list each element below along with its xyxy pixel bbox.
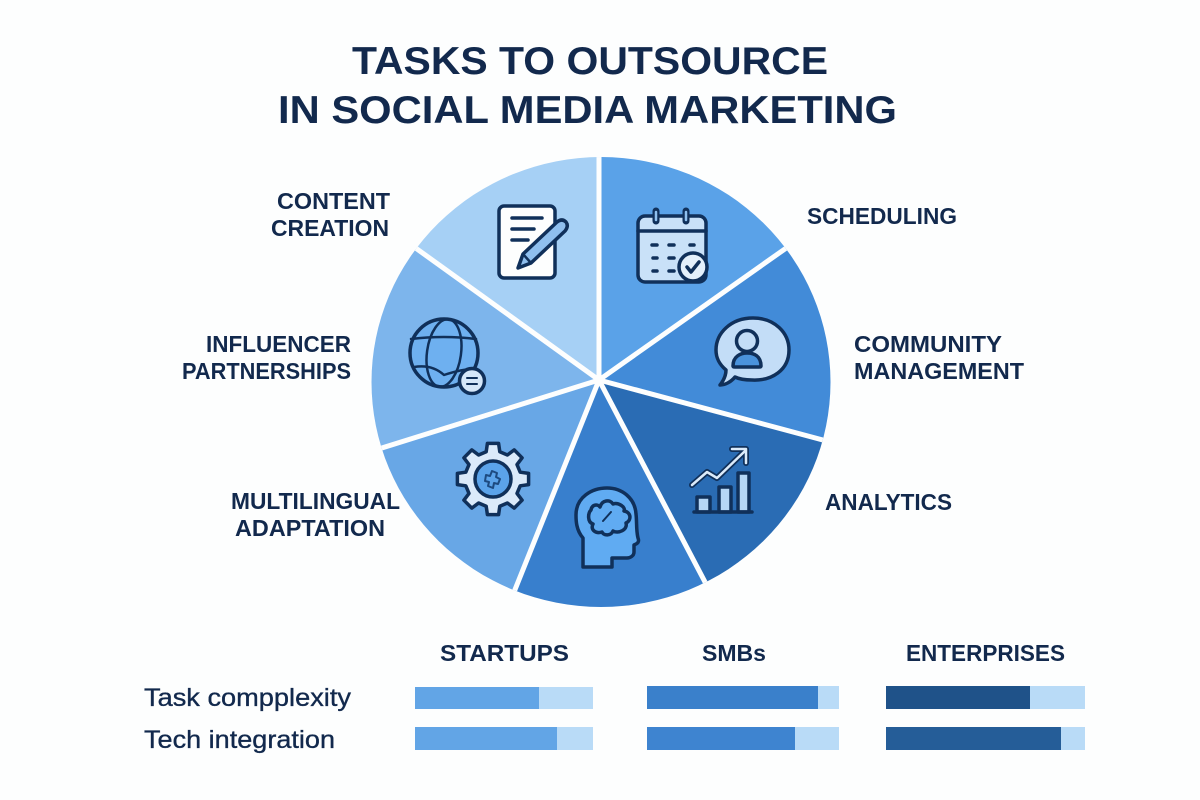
slice: multilingual adaptation [382,384,595,590]
label: community management: COMMUNITY [854,331,1002,357]
column heading: enterprises: ENTERPRISES [906,640,1065,666]
label: scheduling: SCHEDULING [807,203,957,229]
title: IN SOCIAL MEDIA MARKETING [278,89,897,132]
slice: scheduling [599,157,786,376]
slice: analytics [604,384,823,582]
icon: head with brain [576,488,639,567]
row label: tech integration: Tech integration [144,726,335,754]
label: multilingual adaptation [231,488,400,541]
title: TASKS TO OUTSOURCE [352,40,828,83]
icon: globe with chat badge [410,317,484,394]
icon: gear with puzzle [457,443,529,515]
label: influencer partnerships: INFLUENCER [206,331,351,357]
label: influencer partnerships: PARTNERSHIPS [182,358,351,384]
bars: startups [415,687,593,750]
column heading: startups: STARTUPS [440,640,569,666]
row label: task complexity: Task compplexity [144,684,352,712]
label: community management: MANAGEMENT [854,358,1024,384]
label: multilingual adaptation: ADAPTATION [235,515,385,541]
icon: document and pencil [499,206,567,278]
bars: SMBs [647,686,839,750]
slice: content creation [416,157,598,375]
label: content creation [271,188,390,241]
slice: brain [515,386,705,607]
label: influencer partnerships [182,331,351,384]
bars: enterprises [886,686,1085,750]
icon: speech bubble with person [716,318,789,385]
label: analytics: ANALYTICS [825,489,952,515]
label: content creation: CONTENT [277,188,390,214]
slice: influencer partnerships [372,248,594,448]
title [278,40,897,132]
label: community management [854,331,1024,384]
label: content creation: CREATION [271,215,389,241]
pie chart [372,157,830,607]
icon: calendar with check [638,211,707,282]
column heading: SMBs: SMBs [702,640,766,666]
label: multilingual adaptation: MULTILINGUAL [231,488,400,514]
slice: community management [604,248,830,440]
icon: growth chart [692,449,752,512]
